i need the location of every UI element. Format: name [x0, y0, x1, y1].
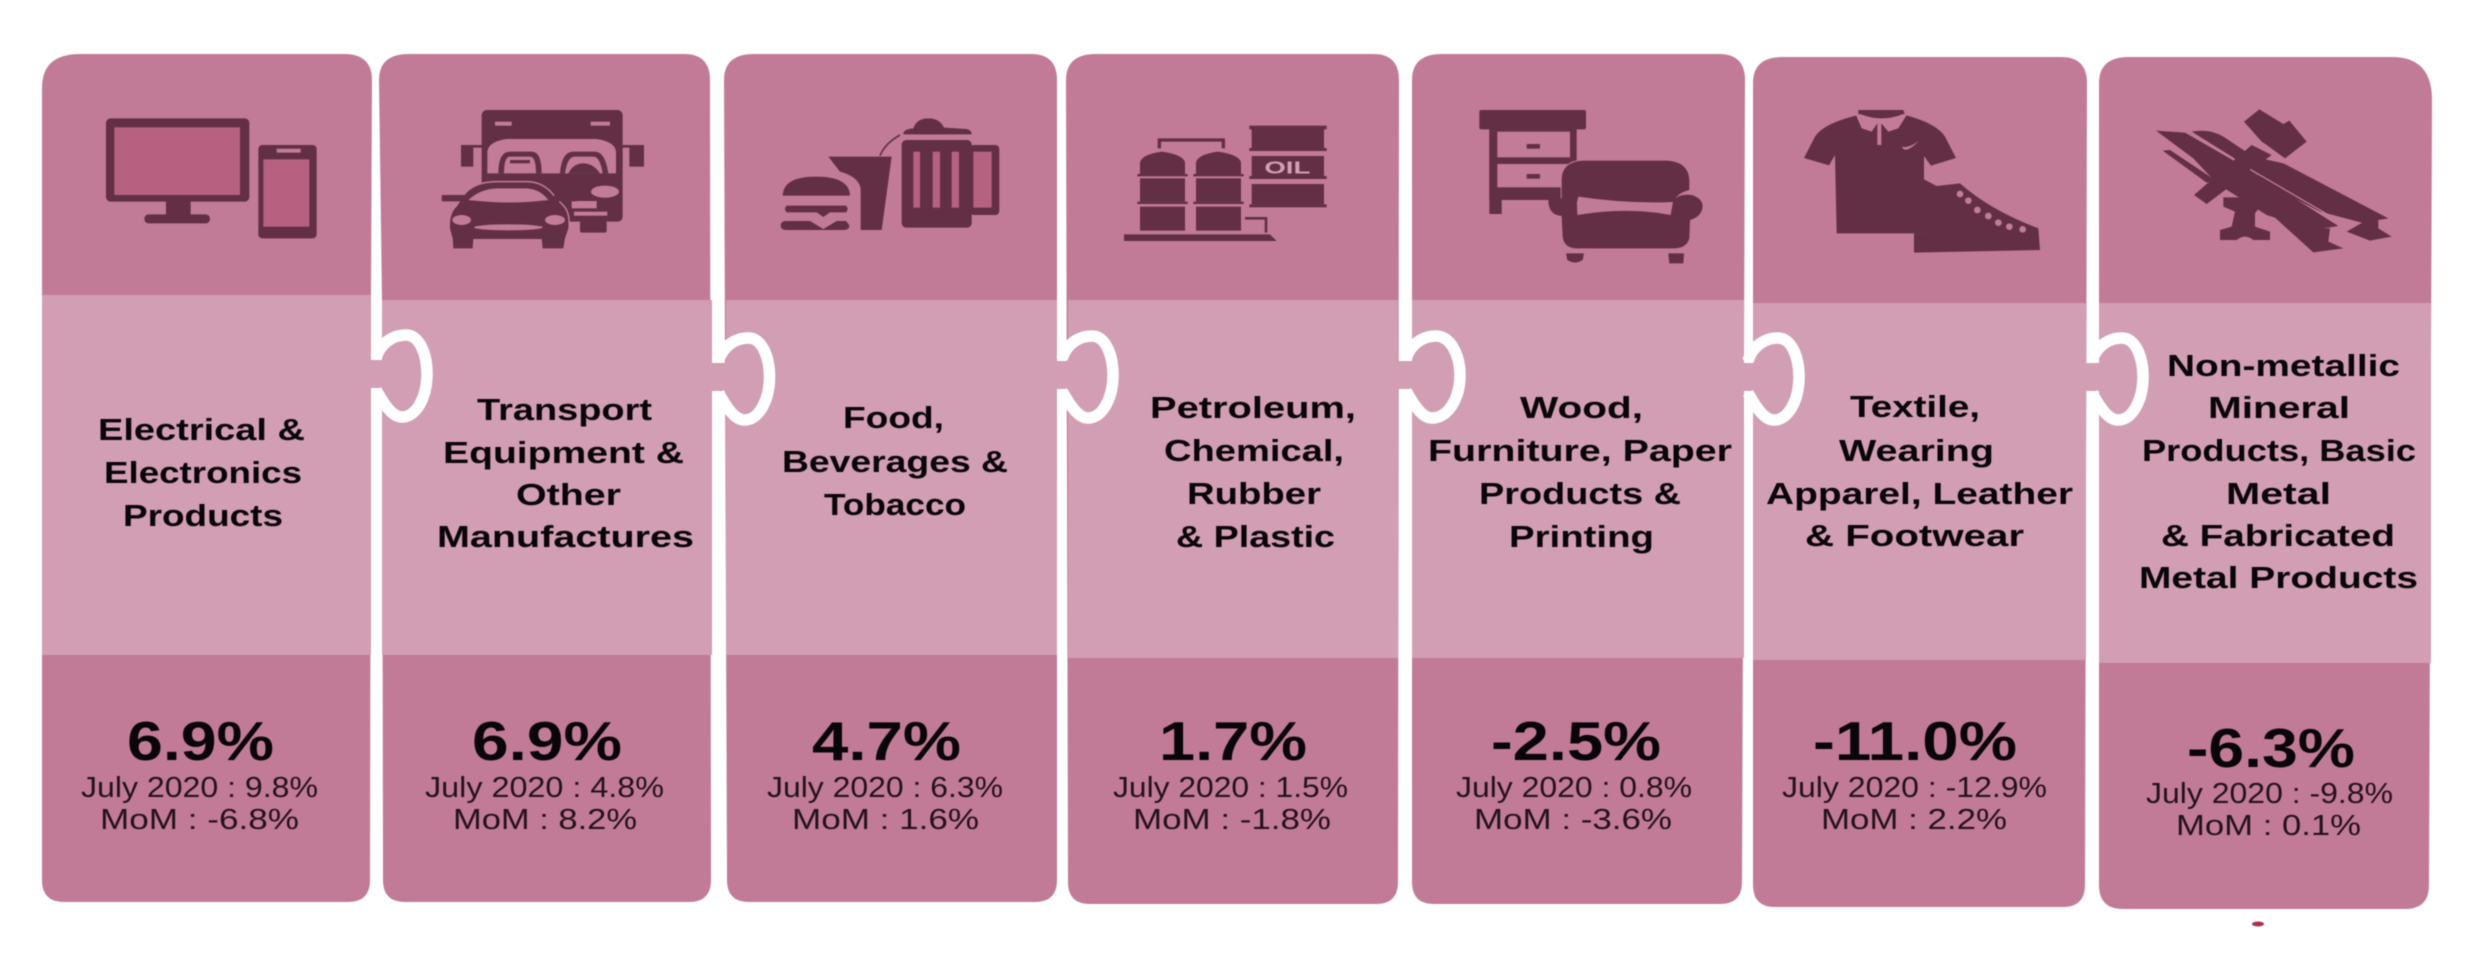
heading: sector name: Electrical &	[98, 412, 305, 447]
stat: growth figures: -11.0%	[1813, 710, 2017, 772]
heading: sector name: Electronics	[104, 455, 302, 490]
panel: Textile, Wearing Apparel, Leather & Footwear	[1743, 57, 2087, 907]
stat: growth figures: July 2020 : -12.9%	[1782, 772, 2047, 804]
heading: sector name: Products &	[1479, 476, 1681, 511]
panel: Wood, Furniture, Paper Products & Printing	[1397, 54, 1745, 904]
heading: sector name: Textile,	[1850, 389, 1980, 424]
stat: growth figures	[425, 710, 664, 836]
heading: sector name	[1150, 390, 1356, 554]
heading: sector name: Products	[123, 498, 283, 533]
heading: sector name: Products, Basic	[2142, 433, 2416, 468]
stat: growth figures	[767, 710, 1003, 836]
panel: Electrical & Electronics Products	[42, 54, 372, 902]
heading: sector name: Transport	[477, 392, 652, 427]
heading: sector name	[1428, 390, 1732, 554]
stat: growth figures: -6.3%	[2187, 717, 2355, 779]
stat: growth figures: July 2020 : 9.8%	[81, 772, 318, 804]
heading: sector name	[437, 392, 694, 554]
heading: sector name: & Plastic	[1176, 519, 1335, 554]
puzzle connector	[1062, 336, 1113, 418]
heading: sector name: & Fabricated	[2161, 518, 2395, 553]
stat: growth figures	[1782, 710, 2047, 836]
stat: growth figures: MoM : -3.6%	[1474, 804, 1672, 836]
puzzle connector	[2092, 338, 2143, 420]
heading: sector name: Mineral	[2208, 390, 2350, 425]
stat: growth figures: 6.9%	[472, 710, 622, 772]
stat: growth figures: July 2020 : 1.5%	[1113, 772, 1348, 804]
red speck below last panel	[2252, 922, 2264, 926]
heading: sector name	[1766, 389, 2073, 553]
stat: growth figures: MoM : -6.8%	[100, 804, 299, 836]
heading: sector name: Food,	[843, 400, 944, 435]
puzzle connector	[376, 335, 427, 417]
icon: steel beams, hammer and anvil	[2156, 109, 2392, 252]
panel: Non-metallic Mineral Products, Basic Metal & Fabricated Metal Products	[2085, 57, 2432, 909]
icon: truck and car	[442, 110, 644, 248]
heading: sector name: & Footwear	[1805, 518, 2024, 553]
stat: growth figures: July 2020 : 4.8%	[425, 772, 664, 804]
heading: sector name: Beverages &	[782, 444, 1008, 479]
stat: growth figures: 6.9%	[127, 710, 274, 772]
puzzle connector	[718, 338, 770, 420]
stat: growth figures: MoM : -1.8%	[1133, 804, 1331, 836]
stat: growth figures	[1113, 710, 1348, 836]
stat: growth figures: MoM : 2.2%	[1821, 804, 2007, 836]
heading: sector name: Apparel, Leather	[1766, 476, 2073, 511]
icon: burger, drink and mug	[781, 118, 999, 230]
heading: sector name: Furniture, Paper	[1428, 433, 1732, 468]
stat: growth figures: July 2020 : 6.3%	[767, 772, 1003, 804]
heading: sector name: Non-metallic	[2167, 348, 2400, 383]
panel: Transport Equipment & Other Manufactures	[370, 54, 712, 902]
heading: sector name: Manufactures	[437, 519, 694, 554]
stat: growth figures: MoM : 8.2%	[453, 804, 637, 836]
stat: growth figures: MoM : 1.6%	[792, 804, 979, 836]
heading: sector name: Equipment &	[443, 435, 684, 470]
heading: sector name	[2139, 348, 2418, 595]
heading: sector name: Other	[516, 477, 621, 512]
heading: sector name: Wood,	[1520, 390, 1643, 425]
icon: storage tanks and oil barrel: OIL	[1264, 157, 1310, 177]
heading: sector name: Wearing	[1839, 433, 1994, 468]
stat: growth figures	[81, 710, 318, 836]
stat: growth figures: 4.7%	[812, 710, 961, 772]
icon: nightstand and armchair	[1479, 110, 1703, 263]
stat: growth figures	[2146, 717, 2393, 842]
stat: growth figures: 1.7%	[1159, 710, 1307, 772]
heading: sector name: Printing	[1509, 519, 1654, 554]
panel: Food, Beverages & Tobacco	[711, 54, 1057, 902]
heading: sector name: Petroleum,	[1150, 390, 1356, 425]
puzzle connector	[1748, 338, 1799, 420]
puzzle connector	[1406, 336, 1460, 418]
heading: sector name: Chemical,	[1164, 433, 1344, 468]
stat: growth figures	[1456, 710, 1692, 836]
icon: shirt and shoe	[1803, 110, 2040, 253]
stat: growth figures: July 2020 : 0.8%	[1456, 772, 1692, 804]
heading: sector name: Metal Products	[2139, 560, 2418, 595]
stat: growth figures: July 2020 : -9.8%	[2146, 778, 2393, 810]
heading: sector name	[98, 412, 305, 533]
icon: storage tanks and oil barrel	[1124, 126, 1327, 241]
heading: sector name: Rubber	[1187, 476, 1321, 511]
stat: growth figures: MoM : 0.1%	[2176, 810, 2361, 842]
stat: growth figures: -2.5%	[1491, 710, 1661, 772]
heading: sector name: Tobacco	[824, 487, 966, 522]
icon: monitor and phone	[106, 118, 317, 238]
heading: sector name	[782, 400, 1008, 522]
heading: sector name: Metal	[2226, 476, 2331, 511]
panel: Petroleum, Chemical, Rubber & Plastic	[1056, 54, 1399, 904]
